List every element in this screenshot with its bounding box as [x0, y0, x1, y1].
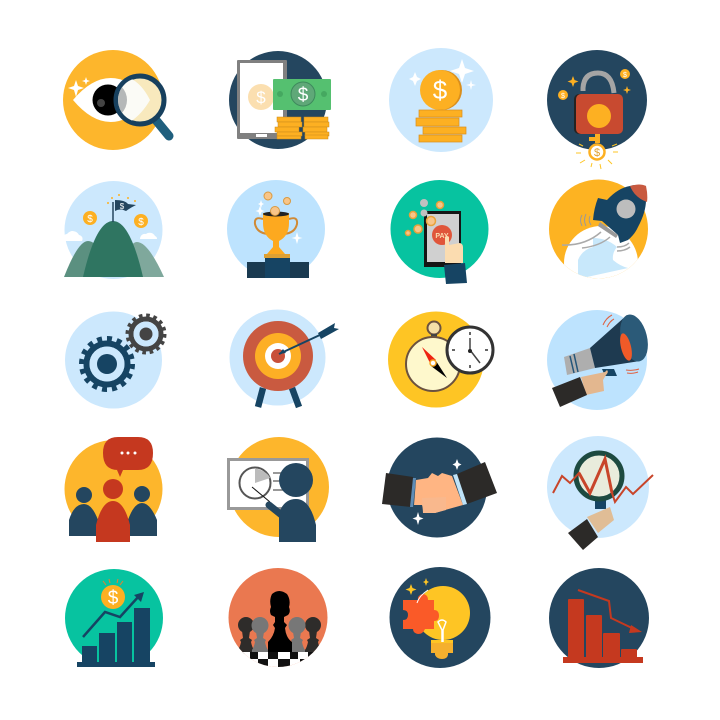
icon: handshake: [382, 438, 497, 538]
icon: coin on stack: $: [433, 75, 448, 105]
icon: team with speech bubble: [64, 437, 162, 542]
icon: tablet, banknote and coins: $: [256, 88, 266, 107]
icon: padlock with key: $: [623, 72, 627, 79]
icon: rising bar chart with coin: $: [108, 588, 119, 609]
icon: megaphone in hand: [547, 310, 652, 410]
icon: rising bar chart with coin: [65, 569, 163, 667]
icon: tablet payment: [390, 180, 488, 284]
icon: falling bar chart: [549, 568, 649, 668]
icon: mountain with flag: $: [120, 202, 125, 211]
icon: target with arrow: [230, 310, 339, 407]
icon: magnifier over chart: [547, 436, 653, 550]
icon: trophy on podium: [227, 180, 325, 278]
icon: padlock with key: [547, 50, 647, 169]
icon: puzzle piece and light bulb: [390, 567, 490, 668]
icon: rocket launching from earth: [549, 180, 648, 278]
icon: mountain with flag: $: [138, 217, 144, 228]
icon: tablet payment: PAY: [435, 233, 449, 240]
icon: chess pawns: [228, 568, 328, 668]
icon: mountain with flag: [62, 181, 164, 279]
icon: mountain with flag: $: [87, 214, 93, 225]
icon: presenter with board: [228, 437, 329, 542]
icon: coin on stack: [389, 48, 493, 152]
icon: eye with magnifier: [63, 50, 169, 150]
icon: tablet, banknote and coins: $: [298, 85, 309, 106]
icon: padlock with key: $: [594, 147, 600, 159]
icon grid: [63, 48, 654, 668]
icon: tablet, banknote and coins: [229, 51, 331, 149]
icon: compass and clock: [388, 312, 493, 408]
icon: gears: [65, 312, 164, 408]
icon: padlock with key: $: [561, 93, 565, 100]
